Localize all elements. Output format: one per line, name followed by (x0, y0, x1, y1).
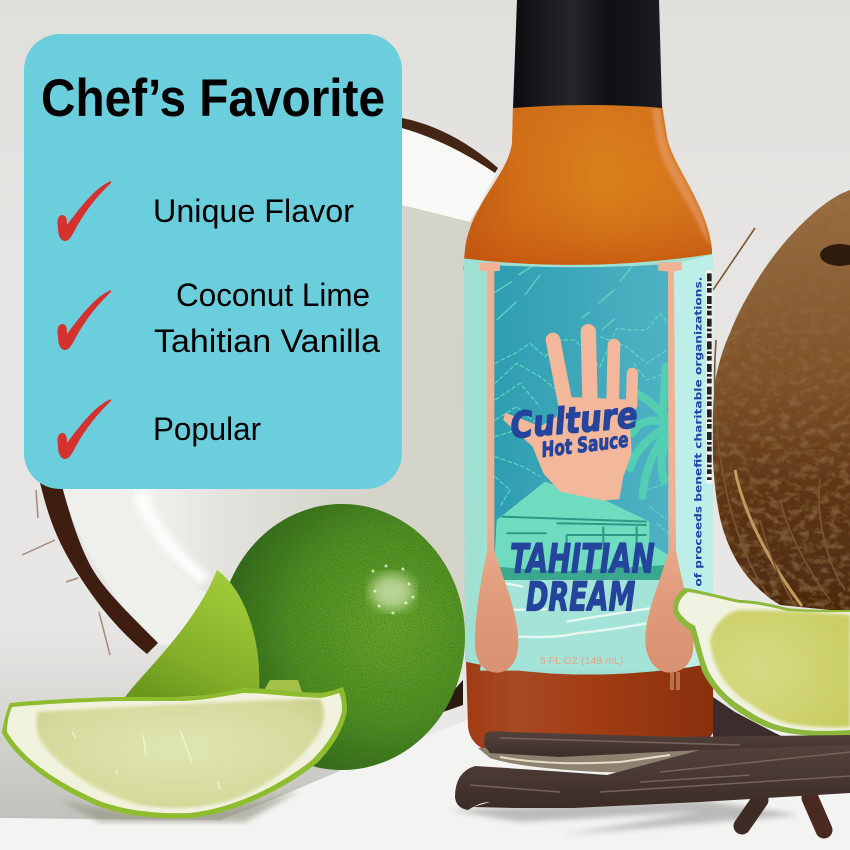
wedge peel (673, 588, 850, 736)
hut roofs (493, 482, 668, 583)
husk (712, 190, 850, 612)
bright ridge of flesh (140, 490, 205, 580)
foliage band (495, 565, 667, 582)
label base (463, 254, 713, 675)
info panel (24, 34, 402, 489)
loose husk fibres (22, 490, 110, 655)
shell hollow (127, 205, 480, 640)
water highlights (505, 583, 650, 637)
lime peel scrap (263, 680, 302, 692)
vanilla beans (455, 697, 850, 830)
palm tree (630, 367, 667, 496)
shell rim lower (30, 440, 158, 654)
thin fibres (713, 228, 845, 605)
shell flesh upper (402, 124, 497, 222)
bottom sauce (466, 660, 713, 752)
glass base glint (500, 755, 670, 763)
product name: TAHITIAN (510, 537, 655, 583)
panel background (24, 34, 402, 489)
coconut whole, right (712, 190, 850, 612)
wedge pulp (710, 610, 850, 727)
lime glints (372, 565, 414, 614)
scenery linework (495, 313, 668, 533)
label right side (673, 254, 713, 670)
sky strokes (493, 267, 632, 330)
charity side text: of proceeds benefit charitable organizations. (693, 277, 704, 587)
sauce highlight (652, 108, 710, 245)
item: tahitian vanilla: Tahitian Vanilla (154, 323, 380, 359)
shell rim upper (402, 118, 498, 173)
pulp glints (72, 730, 220, 790)
item: unique flavor: Unique Flavor (153, 193, 354, 229)
green whole lime (219, 504, 465, 770)
bean two (455, 745, 850, 810)
coconut half shell (22, 118, 498, 712)
hand (503, 332, 637, 501)
product name line 2: DREAM (526, 575, 635, 621)
shell flesh lower (60, 200, 480, 645)
wedge pulp (36, 699, 324, 808)
hut details (502, 517, 647, 563)
sauce vertical shading (463, 105, 712, 270)
bean stub left (742, 800, 760, 826)
label teal panel (492, 264, 668, 583)
cap (513, 0, 662, 108)
bean behind lime (713, 697, 800, 745)
hot sauce bottle (463, 0, 720, 775)
wedge peel (2, 687, 347, 818)
wedge rind (678, 592, 850, 731)
shell piece behind lime (443, 680, 463, 712)
thick pale fibre (735, 470, 802, 606)
lime wedge right (673, 588, 850, 736)
nutrition strip (706, 270, 713, 483)
bean stub right (810, 798, 824, 830)
bean one (484, 731, 850, 760)
wedge table shadow (60, 790, 300, 822)
table shadows (450, 800, 800, 835)
brand text: Culture (509, 395, 639, 447)
water (480, 580, 673, 671)
lime wedge behind (125, 570, 259, 697)
wedge rind (7, 693, 342, 813)
check mark 2 (57, 290, 111, 350)
lime highlight (370, 574, 414, 610)
neck and shoulder sauce (463, 105, 712, 270)
right paddle (645, 262, 693, 673)
check mark 3 (57, 399, 111, 459)
item: coconut lime: Coconut Lime (176, 277, 370, 313)
coconut eye (820, 244, 850, 266)
brand subtitle: Hot Sauce (540, 428, 630, 462)
heading: Chef’s Favorite (41, 69, 385, 128)
nutrition lines (702, 273, 716, 480)
left paddle (475, 263, 518, 673)
item: popular: Popular (153, 411, 261, 447)
volume: 5 FL OZ (148 mL) (540, 656, 623, 667)
lime wedge front (2, 687, 347, 818)
table surface (0, 715, 850, 850)
check mark 1 (57, 181, 111, 241)
wall shadow lower left (0, 620, 340, 820)
bean highlights (470, 738, 850, 792)
glass base (478, 748, 720, 775)
lime body (219, 504, 465, 770)
sauce glints (670, 672, 680, 690)
front label (463, 254, 713, 675)
